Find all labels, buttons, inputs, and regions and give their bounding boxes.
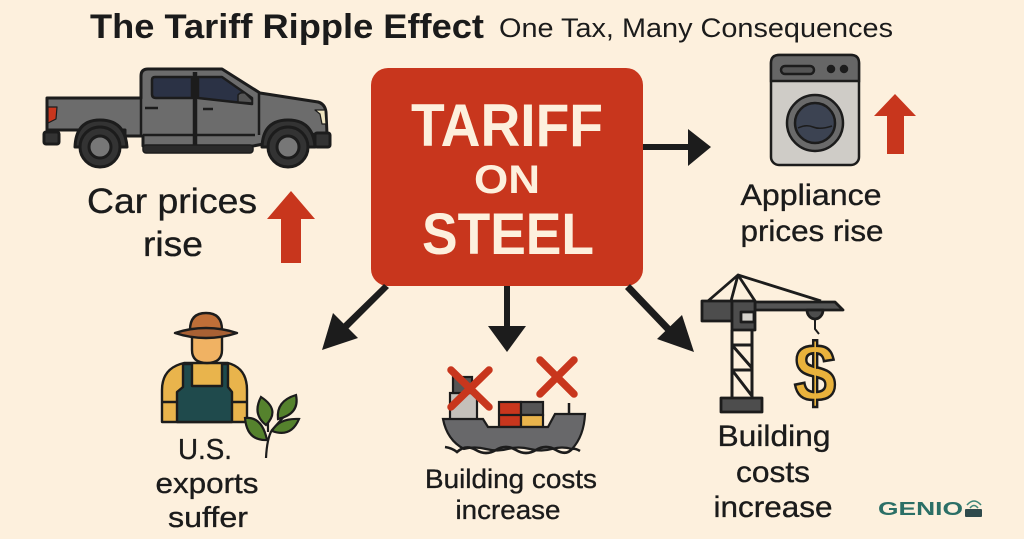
arrow: to shipping (488, 286, 526, 352)
arrow: car price up (267, 191, 315, 263)
icon: logo wifi chip (965, 501, 982, 517)
logo: genio: GENIO (878, 499, 963, 519)
icon: red cross (540, 360, 574, 394)
label: building costs increase (crane): costs (736, 456, 810, 489)
central text: on: ON (474, 158, 540, 202)
label: appliance prices rise: Appliance (740, 179, 882, 212)
label: U.S. exports suffer: exports (156, 468, 258, 500)
central text: steel: STEEL (422, 202, 594, 267)
label: U.S. exports suffer: suffer (168, 502, 248, 534)
label: building costs increase (crane): Building (718, 420, 830, 453)
logo: genio (878, 499, 982, 519)
panel: central tariff box (371, 68, 643, 286)
icon: red cross on ship (451, 370, 489, 407)
arrow: to construction (625, 284, 694, 352)
icon: construction crane (702, 275, 843, 412)
label: car prices rise: rise (143, 225, 203, 264)
subtitle: One Tax, Many Consequences (499, 13, 893, 43)
label: car prices rise: Car prices (87, 182, 257, 221)
label: appliance prices rise: prices rise (740, 215, 884, 248)
arrow: to appliances (643, 129, 711, 166)
label: building costs increase (ship): Building costs (425, 464, 597, 494)
label: U.S. exports suffer: U.S. (178, 434, 232, 466)
central text: tariff: TARIFF (411, 92, 603, 159)
icon: farmer (162, 313, 247, 422)
icon: plant sprig (245, 395, 299, 458)
title: The Tariff Ripple Effect (90, 8, 484, 46)
icon: pickup truck (44, 69, 330, 167)
icon: washing machine (771, 55, 859, 165)
label: building costs increase (ship): increase (456, 495, 560, 525)
arrow: appliance price up (874, 94, 916, 154)
icon: cargo ship (443, 377, 585, 453)
icon: dollar sign: $ (794, 328, 836, 419)
front and rear wheels (75, 120, 315, 167)
label: building costs increase (crane): increase (714, 491, 832, 524)
arrow: to exports (322, 284, 389, 350)
